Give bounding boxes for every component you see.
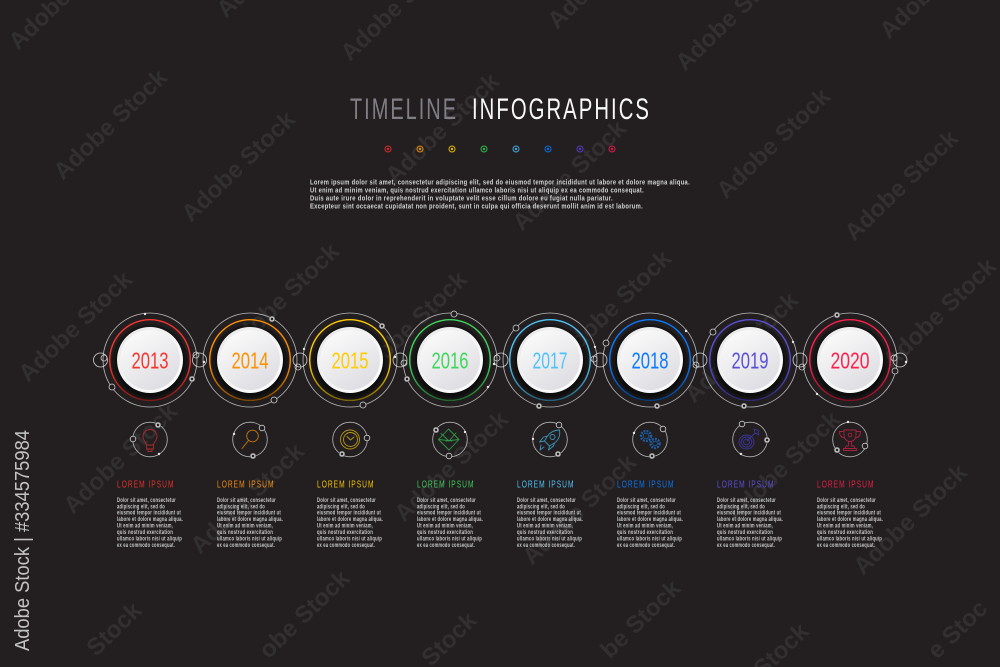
body text: Dolor sit amet, consectetur	[417, 497, 476, 504]
heading: LOREM IPSUM	[117, 479, 174, 490]
year label: 2017	[532, 348, 568, 374]
watermark pattern: be Stock	[595, 574, 687, 664]
body text: adipiscing elit, sed do	[817, 503, 865, 510]
heading: LOREM IPSUM	[817, 479, 874, 490]
timeline item: 2015	[293, 313, 397, 549]
watermark pattern: Adobe Stock	[58, 398, 183, 519]
body text: ex ea commodo consequat.	[317, 542, 375, 549]
body text: eiusmod tempor incididunt ut	[117, 510, 181, 517]
body text: eiusmod tempor incididunt ut	[617, 510, 681, 517]
body text: adipiscing elit, sed do	[717, 503, 765, 510]
heading: LOREM IPSUM	[317, 479, 374, 490]
body text: ex ea commodo consequat.	[117, 542, 175, 549]
body text: Ut enim ad minim veniam,	[417, 522, 473, 530]
watermark pattern: Stock	[81, 596, 148, 662]
body text	[317, 497, 383, 549]
body text: adipiscing elit, sed do	[317, 503, 365, 510]
body text: eiusmod tempor incididunt ut	[417, 510, 481, 517]
body text	[417, 497, 483, 549]
orbit icon: clock	[333, 422, 370, 457]
year label: 2015	[332, 348, 368, 374]
body text: eiusmod tempor incididunt ut	[517, 510, 581, 517]
timeline item: 2013	[94, 313, 197, 549]
body text: ullamco laboris nisi ut aliquip	[317, 535, 382, 542]
body text	[717, 497, 783, 549]
timeline item: 2017	[493, 313, 597, 549]
body text: quis nostrud exercitation	[217, 529, 273, 536]
title: TIMELINE	[350, 93, 458, 126]
year label: 2014	[232, 348, 269, 374]
body text: Dolor sit amet, consectetur	[617, 497, 676, 504]
watermark pattern: Adobe Stock	[176, 106, 301, 227]
body text: ullamco laboris nisi ut aliquip	[817, 535, 882, 542]
body text: labore et dolore magna aliqua.	[417, 516, 483, 523]
watermark pattern: Adobe Stock	[220, 238, 345, 359]
body text: adipiscing elit, sed do	[117, 503, 165, 510]
title	[350, 93, 651, 126]
watermark pattern: Adobe Stock	[389, 406, 514, 527]
body text: quis nostrud exercitation	[417, 529, 473, 536]
body text: Ut enim ad minim veniam,	[717, 522, 773, 530]
body text: quis nostrud exercitation	[317, 529, 373, 536]
body text: ex ea commodo consequat.	[217, 542, 275, 549]
intro text	[310, 178, 690, 211]
timeline item: 2018	[591, 313, 697, 549]
body text: quis nostrud exercitation	[717, 529, 773, 536]
year label: 2018	[632, 348, 668, 374]
body text: ullamco laboris nisi ut aliquip	[517, 535, 582, 542]
body text: Dolor sit amet, consectetur	[717, 497, 776, 504]
intro text: Excepteur sint occaecat cupidatat non proident, sunt in culpa qui officia deserunt mollit anim id est laborum.	[310, 202, 643, 211]
timeline item: 2016	[393, 311, 497, 549]
intro text: Lorem ipsum dolor sit amet, consectetur adipiscing elit, sed do eiusmod tempor incididunt ut labore et dolore magna aliqua.	[310, 178, 690, 186]
watermark pattern: Adobe Stock	[711, 83, 836, 204]
body text: adipiscing elit, sed do	[517, 503, 565, 510]
orbit icon: gears	[633, 422, 667, 459]
watermark pattern: Adobe Stock	[721, 406, 846, 527]
body text: ex ea commodo consequat.	[817, 542, 875, 549]
body text: ex ea commodo consequat.	[517, 542, 575, 549]
watermark pattern: Adobe Stock	[48, 64, 173, 185]
body text	[117, 497, 183, 549]
watermark pattern: Adobe Stock	[848, 459, 973, 580]
watermark pattern: Adobe Stock	[507, 115, 632, 236]
body text: Ut enim ad minim veniam,	[617, 522, 673, 530]
body text: eiusmod tempor incididunt ut	[217, 510, 281, 517]
body text: Dolor sit amet, consectetur	[217, 497, 276, 504]
timeline item: 2014	[192, 313, 297, 549]
watermark pattern: Adobe Stock	[839, 125, 964, 246]
body text: ex ea commodo consequat.	[417, 542, 475, 549]
intro text: Ut enim ad minim veniam, quis nostrud exercitation ullamco laboris nisi ut aliquip ex ea commodo consequat.	[310, 186, 644, 195]
body text: ullamco laboris nisi ut aliquip	[117, 535, 182, 542]
heading: LOREM IPSUM	[417, 479, 474, 490]
body text: quis nostrud exercitation	[117, 529, 173, 536]
body text: labore et dolore magna aliqua.	[517, 516, 583, 523]
watermark pattern: Adobe Stock	[552, 245, 677, 366]
body text: ex ea commodo consequat.	[717, 542, 775, 549]
watermark pattern: obe Stock	[254, 564, 356, 664]
intro text: Duis aute irure dolor in reprehenderit in voluptate velit esse cillum dolore eu fugiat nulla pariatur.	[310, 194, 613, 203]
body text: labore et dolore magna aliqua.	[617, 516, 683, 523]
year label: 2019	[732, 348, 768, 374]
body text: labore et dolore magna aliqua.	[717, 516, 783, 523]
body text: quis nostrud exercitation	[517, 529, 573, 536]
body text: ullamco laboris nisi ut aliquip	[617, 535, 682, 542]
body text: Dolor sit amet, consectetur	[117, 497, 176, 504]
watermark pattern: Adobe Stock	[679, 287, 804, 408]
body text: labore et dolore magna aliqua.	[117, 516, 183, 523]
watermark pattern: Adobe Stock	[348, 266, 473, 387]
orbit icon: light bulb	[130, 422, 167, 457]
body text: ex ea commodo consequat.	[617, 542, 675, 549]
orbit icon: dart target	[733, 421, 770, 457]
body text: ullamco laboris nisi ut aliquip	[717, 535, 782, 542]
title: INFOGRAPHICS	[472, 93, 651, 126]
body text: ullamco laboris nisi ut aliquip	[217, 535, 282, 542]
orbit icon: magnifier	[233, 422, 267, 459]
body text	[517, 497, 583, 549]
year label: 2013	[132, 348, 168, 374]
side credit text: Adobe Stock | #334575984	[12, 430, 34, 651]
body text: labore et dolore magna aliqua.	[317, 516, 383, 523]
body text: Ut enim ad minim veniam,	[217, 522, 273, 530]
body text: Dolor sit amet, consectetur	[317, 497, 376, 504]
orbit icon: rocket	[532, 422, 567, 457]
watermark pattern: Adobe Stock	[185, 438, 310, 559]
heading: LOREM IPSUM	[617, 479, 674, 490]
body text: ullamco laboris nisi ut aliquip	[417, 535, 482, 542]
body text: adipiscing elit, sed do	[217, 503, 265, 510]
year label: 2016	[432, 348, 468, 374]
body text	[817, 497, 883, 549]
heading: LOREM IPSUM	[717, 479, 774, 490]
timeline item: 2019	[693, 313, 797, 549]
body text: Ut enim ad minim veniam,	[317, 522, 373, 530]
body text: quis nostrud exercitation	[817, 529, 873, 536]
timeline item: 2020	[793, 312, 907, 549]
body text: labore et dolore magna aliqua.	[217, 516, 283, 523]
orbit icon: trophy	[833, 421, 868, 457]
body text: Ut enim ad minim veniam,	[517, 522, 573, 530]
body text: Dolor sit amet, consectetur	[817, 497, 876, 504]
body text: Ut enim ad minim veniam,	[817, 522, 873, 530]
orbit icon: envelope	[433, 422, 467, 459]
watermark pattern: Adobe Stock	[517, 449, 642, 570]
watermark pattern: Adobe Stock	[13, 266, 138, 387]
body text: eiusmod tempor incididunt ut	[717, 510, 781, 517]
body text: eiusmod tempor incididunt ut	[317, 510, 381, 517]
body text	[217, 497, 283, 549]
colored dots row	[385, 146, 615, 152]
watermark pattern: e Stoc	[922, 595, 993, 664]
body text: adipiscing elit, sed do	[417, 503, 465, 510]
body text	[617, 497, 683, 549]
heading: LOREM IPSUM	[517, 479, 574, 490]
body text: eiusmod tempor incididunt ut	[817, 510, 881, 517]
year label: 2020	[830, 348, 870, 374]
body text: Dolor sit amet, consectetur	[517, 497, 576, 504]
heading: LOREM IPSUM	[217, 479, 274, 490]
watermark pattern: Adobe Stock	[877, 253, 1000, 374]
body text: Ut enim ad minim veniam,	[117, 522, 173, 530]
watermark pattern: Adobe Stock	[380, 68, 505, 189]
body text: labore et dolore magna aliqua.	[817, 516, 883, 523]
body text: quis nostrud exercitation	[617, 529, 673, 536]
body text: adipiscing elit, sed do	[617, 503, 665, 510]
